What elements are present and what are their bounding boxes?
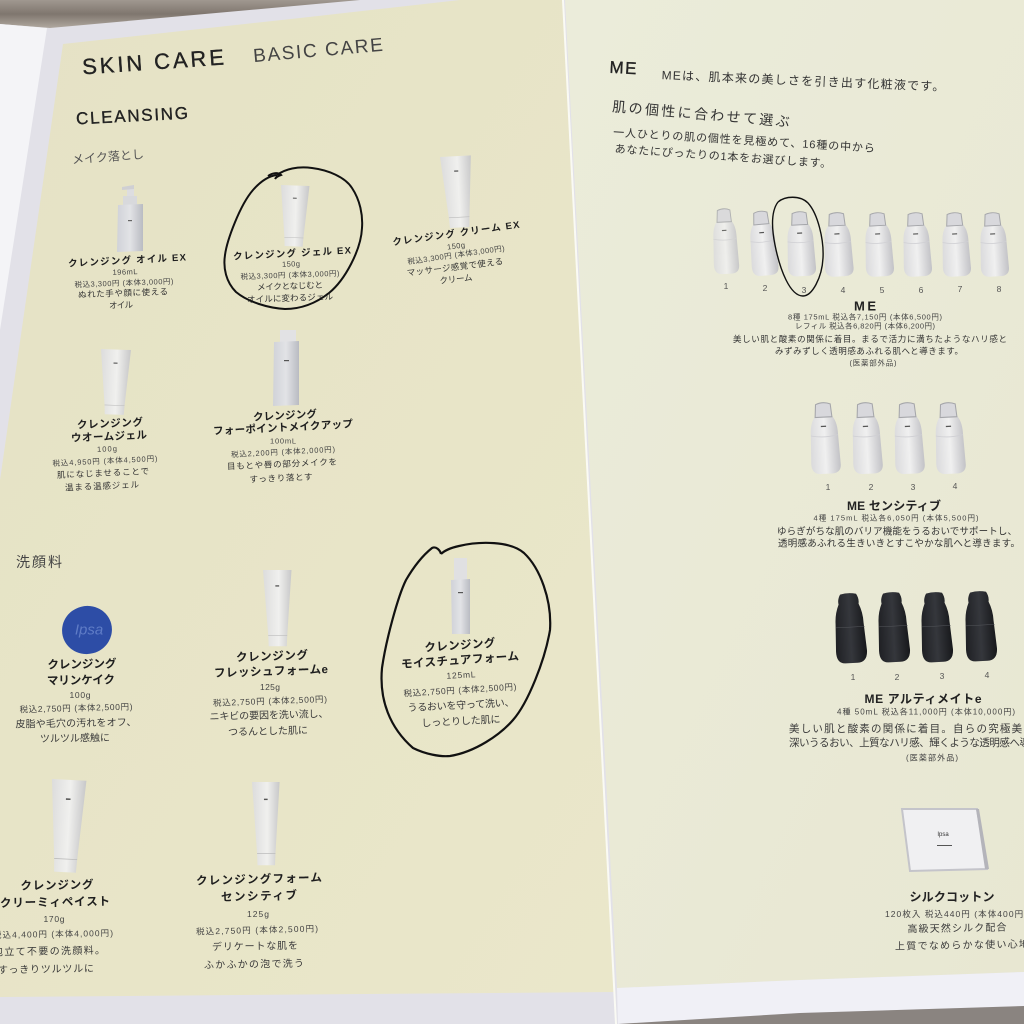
numbers: ME: 2 (763, 283, 768, 293)
product: creamy paste: クリーミィペイスト (0, 895, 110, 910)
product: silk cotton (885, 809, 1024, 953)
product: ME sensitive (777, 402, 1020, 550)
product: ME: レフィル 税込各6,820円 (本体6,200円) (795, 320, 936, 330)
product: silk cotton: 120枚入 税込440円 (本体400円) (885, 909, 1024, 919)
product: cleansing point makeup: 税込2,200円 (本体2,000円) (231, 444, 336, 459)
product: cleansing warm gel: 肌になじませることで (57, 466, 149, 480)
product: ME: みずみずしく透明感あふれる肌へと導きます。 (775, 346, 963, 356)
product: ME ultimate e: ME アルティメイトe (864, 692, 982, 706)
product: foam sensitive: クレンジングフォーム (196, 870, 322, 888)
text: ME intro: MEは、肌本来の美しさを引き出す化粧液です。 (661, 68, 945, 94)
icon: moisture foam bottle (451, 558, 470, 634)
product: cleansing gel EX: メイクとなじむと (257, 280, 323, 292)
icon: oil bottle (117, 185, 143, 252)
product: moisture foam: 125mL (446, 669, 476, 681)
product: creamy paste (0, 779, 113, 976)
numbers: sensitive: 3 (911, 482, 916, 492)
product: cleansing point makeup (213, 330, 354, 484)
product: cleansing gel EX: 150g (282, 259, 300, 269)
product: ME: 美しい肌と酸素の関係に着目。まるで活力に満ちたようなハリ感と (733, 334, 1007, 344)
icon: warm gel tube (99, 349, 131, 415)
product: marine cake: マリンケイク (47, 673, 115, 688)
icon: cream tube (440, 155, 475, 228)
numbers: sensitive: 4 (953, 481, 958, 491)
bottom white strip of right page (617, 972, 1024, 1024)
product: creamy paste: 170g (44, 914, 65, 924)
numbers: ME: 1 (724, 281, 729, 291)
product: moisture foam: 税込2,750円 (本体2,500円) (403, 682, 517, 698)
product: cleansing gel EX: オイルに変わるジェル (247, 291, 334, 304)
product: creamy paste: すっきりツルツルに (0, 963, 94, 976)
icon: blue soap: Ipsa (75, 622, 103, 638)
product: cleansing warm gel: クレンジング (77, 416, 144, 431)
title: BASIC CARE (252, 35, 384, 67)
icon: creamy paste tube (47, 779, 86, 873)
product: cleansing point makeup: クレンジング (253, 407, 318, 424)
product: moisture foam: クレンジング (424, 636, 496, 654)
product: cleansing point makeup: 目もとや唇の部分メイクを (227, 457, 337, 471)
product: marine cake: 100g (70, 690, 91, 700)
numbers: ME: 7 (958, 284, 963, 294)
product: cleansing gel EX (224, 167, 362, 309)
product: cleansing gel EX: クレンジング ジェル EX (233, 244, 352, 263)
product: silk cotton: シルクコットン (910, 890, 994, 904)
product: creamy paste: クレンジング (20, 877, 94, 893)
product: ME: (医薬部外品) (850, 358, 897, 368)
text: intro lines (613, 125, 875, 171)
product: foam sensitive: 税込2,750円 (本体2,500円) (196, 923, 318, 937)
product: cleansing oil EX: 税込3,300円 (本体3,000円) (74, 276, 174, 289)
panel: left page (0, 0, 615, 997)
product: fresh foam e: つるんとした肌に (228, 724, 308, 739)
product: cleansing warm gel: ウオームジェル (71, 429, 148, 445)
numbers: ME: 4 (841, 285, 846, 295)
product: ME sensitive: ゆらぎがちな肌のバリア機能をうるおいでサポートし、 (777, 526, 1017, 538)
product: cleansing oil EX: 196mL (112, 267, 138, 277)
product: foam sensitive: ふかふかの泡で洗う (204, 957, 304, 971)
product: marine cake: ツルツル感触に (40, 731, 110, 745)
product: cleansing point makeup: 100mL (270, 436, 296, 446)
icon: sensitive bottles (808, 402, 966, 475)
product: cleansing cream EX: 税込3,300円 (本体3,000円) (407, 243, 506, 266)
product: cleansing cream EX: 150g (447, 240, 465, 252)
product: cleansing cream EX: マッサージ感覚で使える (406, 256, 504, 278)
icon: point makeup bottle (273, 330, 299, 406)
product: cleansing cream EX (392, 155, 521, 286)
icon: ME bottles (711, 208, 1009, 277)
title (81, 35, 384, 79)
title: SKIN CARE (81, 45, 225, 79)
product: foam sensitive: 125g (247, 909, 269, 919)
product: cleansing oil EX: ぬれた手や顔に使える (78, 286, 168, 300)
product: cleansing oil EX (68, 185, 187, 310)
product: moisture foam: モイスチュアフォーム (401, 650, 519, 671)
product: fresh foam e (209, 570, 329, 739)
product: silk cotton: 高級天然シルク配合 (907, 921, 1007, 935)
numbers: ME: 5 (880, 285, 885, 295)
icon: gel tube (279, 185, 309, 247)
product: fresh foam e: ニキビの要因を洗い流し、 (209, 708, 329, 723)
product: fresh foam e: 125g (260, 682, 280, 692)
product: cleansing point makeup: フォーポイントメイクアップ (213, 418, 354, 438)
heading: makeup remover: メイク落とし (72, 147, 144, 167)
product: fresh foam e: クレンジング (236, 648, 309, 664)
hand-drawn circle: gel (224, 167, 362, 309)
product: moisture foam (382, 543, 550, 756)
inner white flap (0, 24, 47, 330)
hand-drawn circle: ME no.3 (773, 197, 823, 296)
panel: right page (565, 0, 1024, 988)
icon: foam sensitive tube (252, 782, 280, 865)
product: ME (711, 197, 1009, 368)
text: intro lines: 一人ひとりの肌の個性を見極めて、16種の中から (613, 125, 875, 155)
numbers: ultimate: 1 (851, 672, 856, 682)
numbers: ME: 3 (802, 285, 807, 295)
product: cleansing oil EX: クレンジング オイル EX (68, 251, 187, 270)
product: cleansing warm gel (52, 349, 158, 493)
product: ME ultimate e: (医薬部外品) (906, 752, 958, 762)
product: marine cake: クレンジング (47, 656, 117, 672)
icon: blue soap (57, 600, 117, 660)
numbers: sensitive: 2 (869, 482, 874, 492)
product: cleansing warm gel: 税込4,950円 (本体4,500円) (52, 453, 158, 468)
product: foam sensitive: センシティブ (221, 888, 298, 904)
page gutter (563, 0, 616, 1024)
product: marine cake (15, 600, 137, 745)
product: ME ultimate e (789, 590, 1024, 762)
product: cleansing point makeup: すっきり落とす (249, 472, 313, 484)
hand-drawn circle: moisture foam (382, 543, 550, 756)
product: marine cake: 税込2,750円 (本体2,500円) (19, 702, 133, 714)
product: foam sensitive: デリケートな肌を (212, 939, 298, 953)
product: cleansing cream EX: クリーム (439, 272, 473, 286)
background: wooden table top (0, 0, 360, 28)
heading: choose by skin: 肌の個性に合わせて選ぶ (612, 98, 790, 130)
product: cleansing gel EX: 税込3,300円 (本体3,000円) (240, 268, 340, 281)
product: moisture foam: うるおいを守って洗い、 (407, 697, 515, 714)
product: ME sensitive: ME センシティブ (847, 498, 941, 513)
product: marine cake: 皮脂や毛穴の汚れをオフ、 (15, 715, 137, 731)
icon: fresh foam tube (263, 570, 292, 646)
heading: face wash: 洗顔料 (16, 554, 62, 570)
numbers: ME: 8 (997, 284, 1002, 294)
product: cleansing oil EX: オイル (109, 300, 134, 310)
numbers: ME: 6 (919, 285, 924, 295)
product: moisture foam: しっとりした肌に (421, 713, 501, 730)
product: ME sensitive: 4種 175mL 税込各6,050円 (本体5,500円) (814, 512, 979, 522)
product: cleansing warm gel: 100g (97, 444, 117, 454)
numbers: ultimate (851, 670, 990, 682)
numbers: ultimate: 2 (895, 672, 900, 682)
product: foam sensitive (196, 782, 322, 971)
wooden table bottom (618, 1006, 1024, 1024)
icon: silk cotton box (902, 809, 989, 871)
numbers: sensitive (826, 481, 958, 492)
numbers: ME (724, 281, 1002, 295)
numbers: ultimate: 3 (940, 671, 945, 681)
product: fresh foam e: フレッシュフォームe (214, 663, 328, 680)
heading: ME: ME (609, 58, 637, 78)
icon: dark bottles (833, 590, 998, 664)
product: ME ultimate e: 4種 50mL 税込各11,000円 (本体10,000円) (837, 706, 1015, 716)
product: ME: 8種 175mL 税込各7,150円 (本体6,500円) (788, 312, 942, 322)
product: cleansing cream EX: クレンジング クリーム EX (392, 219, 521, 248)
numbers: ultimate: 4 (985, 670, 990, 680)
icon: silk cotton box: Ipsa (937, 832, 949, 838)
product: ME: ME (854, 298, 876, 314)
product: ME sensitive: 透明感あふれる生きいきとすこやかな肌へと導きます。 (778, 538, 1020, 550)
product: fresh foam e: 税込2,750円 (本体2,500円) (213, 694, 327, 708)
heading: cleansing: CLEANSING (76, 104, 188, 128)
numbers: sensitive: 1 (826, 482, 831, 492)
product: cleansing warm gel: 温まる温感ジェル (65, 479, 140, 493)
text: intro lines: あなたにぴったりの1本をお選びします。 (614, 141, 832, 171)
